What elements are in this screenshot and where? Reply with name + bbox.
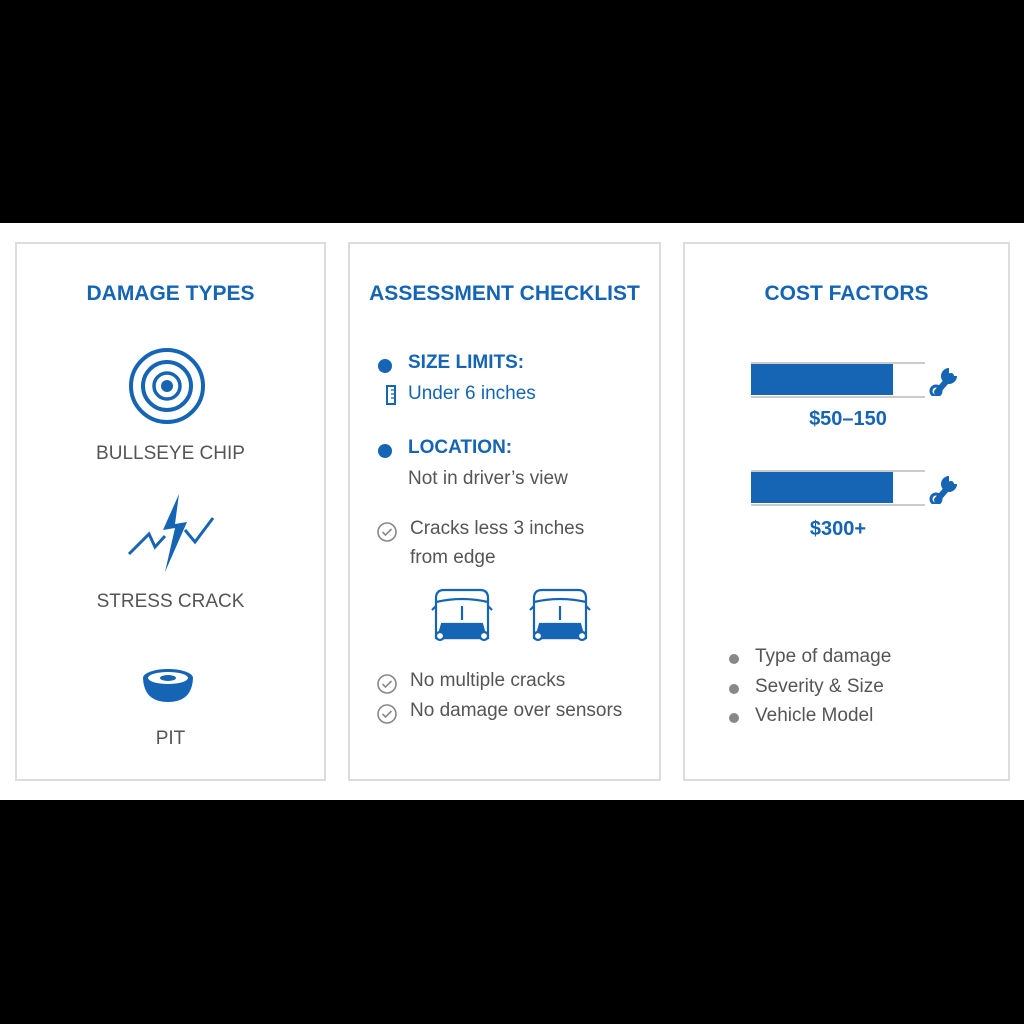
item: size limits: SIZE LIMITS: [408, 352, 524, 373]
heading: cost factors: COST FACTORS [764, 282, 929, 305]
label: bullseye chip: BULLSEYE CHIP [96, 443, 245, 464]
list: cost factors: Severity & Size [755, 676, 884, 697]
item: no damage over sensors: No damage over sensors [410, 700, 622, 721]
label: pit: PIT [156, 728, 185, 749]
list: cost factors [729, 646, 891, 726]
bar: repair cost high [751, 470, 957, 540]
icons: windshield cars [431, 588, 591, 642]
bar: repair cost high: $300+ [810, 518, 866, 540]
heading: assessment checklist: ASSESSMENT CHECKLIST [369, 282, 640, 305]
panel: assessment checklist [348, 242, 661, 781]
heading: damage types: DAMAGE TYPES [86, 282, 255, 305]
list: cost factors: Type of damage [755, 646, 891, 667]
panel: damage types [15, 242, 326, 781]
list: cost factors: Vehicle Model [755, 705, 873, 726]
item: location: LOCATION: [408, 437, 512, 458]
label: stress crack: STRESS CRACK [97, 591, 244, 612]
icon: pit [143, 669, 193, 702]
item: location: Not in driver’s view [408, 468, 568, 489]
item: location [378, 437, 568, 489]
icon: bullseye [129, 348, 205, 424]
bar: repair cost low: $50–150 [809, 408, 887, 430]
item: cracks from edge: from edge [410, 547, 496, 568]
item: size limits: Under 6 inches [408, 383, 536, 404]
item: size limits [378, 352, 536, 405]
item: cracks from edge [377, 518, 584, 568]
icon: stress crack [128, 494, 214, 572]
panel: cost factors [683, 242, 1010, 781]
bar: repair cost low [751, 362, 957, 430]
item: cracks from edge: Cracks less 3 inches [410, 518, 584, 539]
item: no multiple cracks: No multiple cracks [410, 670, 565, 691]
